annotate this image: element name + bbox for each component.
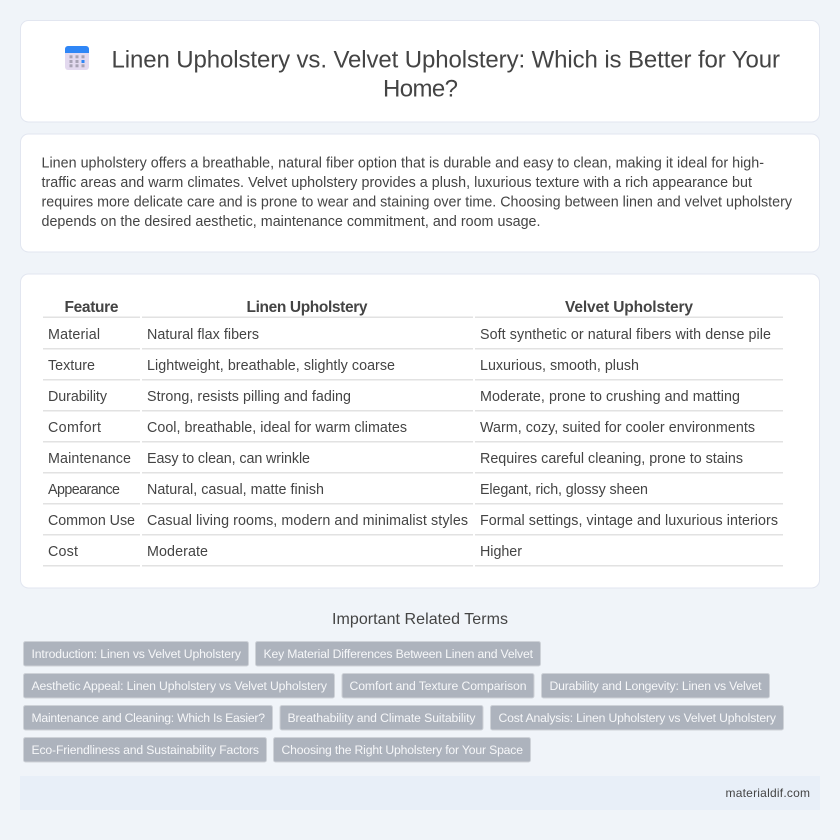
row: common use: Casual living rooms, modern and minimalist styles [147,513,468,529]
chip: comfort and texture: Comfort and Texture Comparison [350,679,526,693]
table header: Velvet Upholstery [565,299,693,316]
chip: maintenance: Maintenance and Cleaning: Which Is Easier? [32,711,265,725]
panel: comparison table [20,274,820,588]
row: cost [48,544,522,560]
title: Linen Upholstery vs. Velvet Upholstery: Which is Better for Your [112,46,780,74]
row: texture: Texture [48,358,95,374]
chip: eco-friendliness: Eco-Friendliness and Sustainability Factors [32,743,259,757]
row: durability: Moderate, prone to crushing and matting [480,389,740,405]
table header [64,299,693,316]
chip: choosing upholstery: Choosing the Right Upholstery for Your Space [282,743,523,757]
chip: cost analysis: Cost Analysis: Linen Upholstery vs Velvet Upholstery [498,711,777,725]
row: common use: Formal settings, vintage and luxurious interiors [480,513,778,529]
title [112,46,780,102]
chip: aesthetic appeal [24,674,334,698]
row: texture: Luxurious, smooth, plush [480,358,639,374]
panel: intro [20,134,820,252]
row: common use [48,513,778,529]
row: comfort [48,420,755,436]
row: maintenance [48,451,743,467]
row: appearance: Appearance [48,482,120,498]
chip: breathability: Breathability and Climate Suitability [288,711,476,725]
text block: intro paragraph: requires more delicate care and is prone to wear and staining over time. Choosing between linen and velvet upholstery [42,194,793,210]
row: appearance: Elegant, rich, glossy sheen [480,482,648,498]
related term chips [24,642,784,762]
row: maintenance: Maintenance [48,451,131,467]
row: material: Material [48,327,100,343]
row: material: Soft synthetic or natural fibers with dense pile [480,327,771,343]
row: appearance [48,482,648,498]
row: material [48,327,771,343]
chip: aesthetic appeal: Aesthetic Appeal: Linen Upholstery vs Velvet Upholstery [32,679,328,693]
heading: related terms: Important Related Terms [332,611,508,628]
text block: intro paragraph [42,155,793,230]
chip: durability: Durability and Longevity: Linen vs Velvet [550,679,762,693]
text block: intro paragraph: depends on the desired aesthetic, maintenance commitment, and room usage. [42,214,540,230]
row: comfort: Comfort [48,420,101,436]
icon: calendar [65,46,89,70]
row: cost: Moderate [147,544,208,560]
row: maintenance: Requires careful cleaning, prone to stains [480,451,743,467]
row: texture: Lightweight, breathable, slightly coarse [147,358,395,374]
row: maintenance: Easy to clean, can wrinkle [147,451,310,467]
footer: materialdif.com [726,786,810,800]
chip: breathability [280,706,483,730]
row: cost: Cost [48,544,78,560]
row: comfort: Cool, breathable, ideal for warm climates [147,420,407,436]
row: durability [48,389,740,405]
table header: Linen Upholstery [246,299,368,316]
chip: durability [542,674,770,698]
row: material: Natural flax fibers [147,327,259,343]
chip: introduction [24,642,248,666]
chip: introduction: Introduction: Linen vs Velvet Upholstery [32,647,242,661]
panel: header [20,20,820,122]
row: common use: Common Use [48,513,135,529]
chip: cost analysis [490,706,784,730]
row: comfort: Warm, cozy, suited for cooler environments [480,420,755,436]
row: appearance: Natural, casual, matte finish [147,482,324,498]
title: Home? [383,76,458,102]
table header: Feature [64,299,119,316]
chip: key material differences: Key Material Differences Between Linen and Velvet [264,647,534,661]
chip: eco-friendliness [24,738,266,762]
text block: intro paragraph: Linen upholstery offers a breathable, natural fiber option that is durable and easy to clean, making it ideal for high- [42,155,764,171]
chip: choosing upholstery [274,738,530,762]
row: texture [48,358,639,374]
footer [20,776,820,810]
chip: comfort and texture [342,674,534,698]
table grid lines [43,316,783,566]
row: durability: Durability [48,389,108,405]
text block: intro paragraph: traffic areas and warm climates. Velvet upholstery provides a plush, luxurious texture with a rich appearance but [42,175,752,191]
chip: maintenance [24,706,272,730]
row: durability: Strong, resists pilling and fading [147,389,351,405]
row: cost: Higher [480,544,522,560]
chip: key material differences [256,642,540,666]
